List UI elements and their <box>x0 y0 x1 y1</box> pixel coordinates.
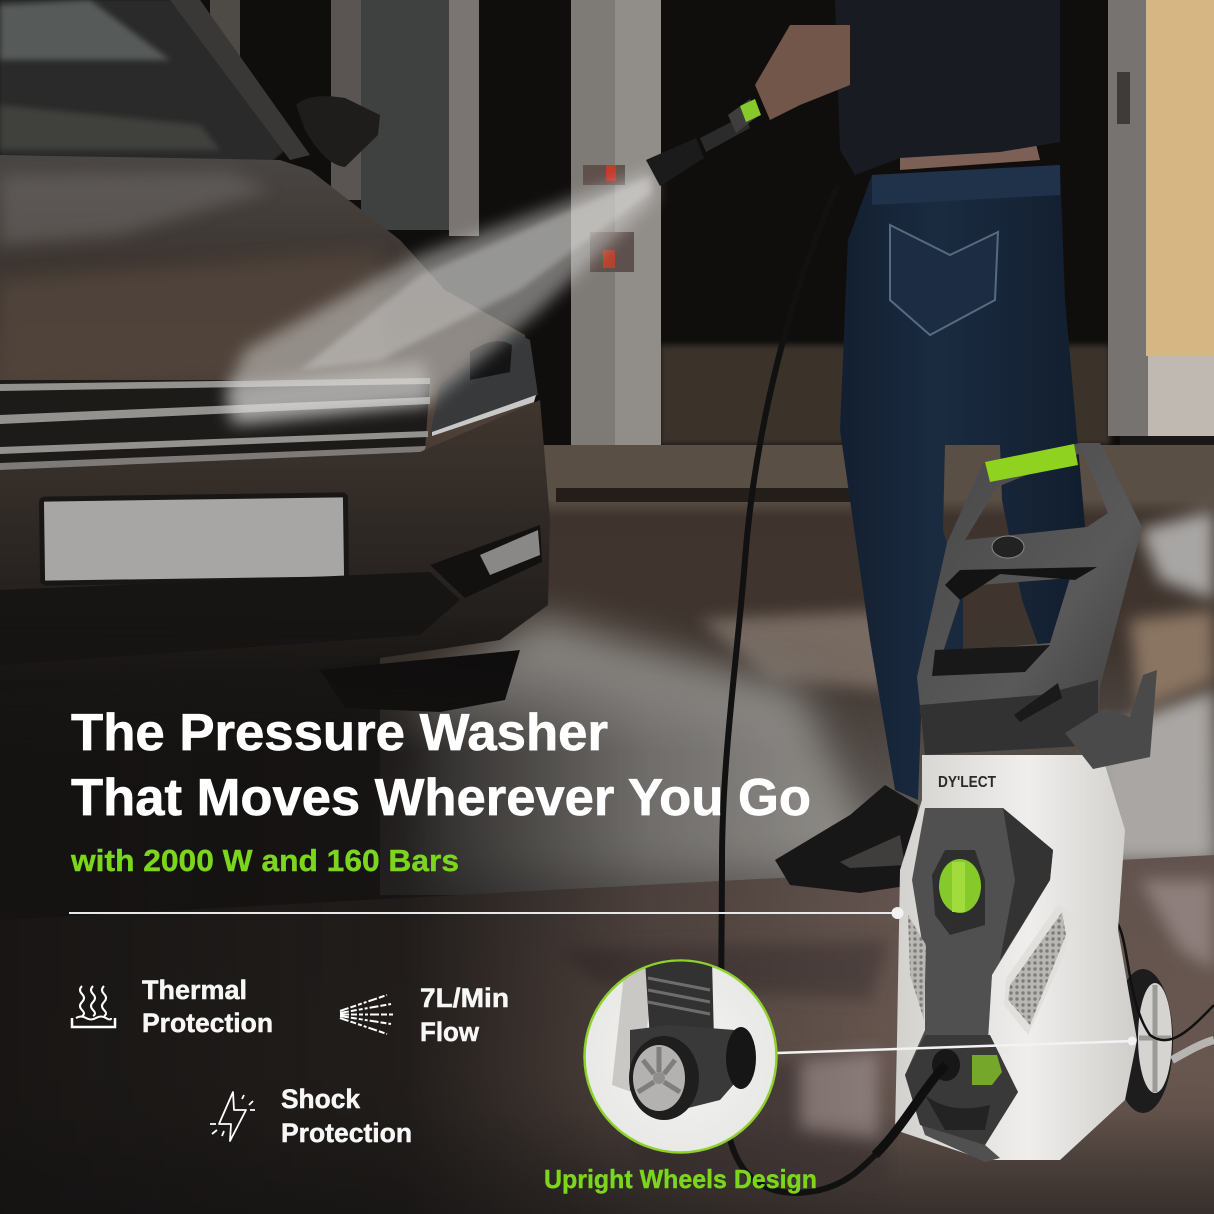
title <box>71 704 811 827</box>
pressure knob <box>932 850 985 935</box>
green handle grip <box>985 444 1078 482</box>
wheel <box>320 650 520 712</box>
inset caption: Upright Wheels Design <box>544 1164 817 1194</box>
spray wand <box>646 99 761 186</box>
divider with end dot <box>69 907 904 919</box>
icon: lightning bolt <box>210 1092 255 1141</box>
inset chassis <box>630 1028 734 1108</box>
supply hose <box>1172 1040 1214 1060</box>
left vent <box>908 915 926 1020</box>
hanger knob <box>992 536 1024 558</box>
skin at waist <box>900 140 1040 170</box>
car A-pillar and roof edge <box>170 0 310 160</box>
arm <box>755 25 850 120</box>
man <box>755 0 1085 893</box>
inset far wheel <box>726 1027 756 1089</box>
socket and hose connector <box>875 1049 960 1155</box>
feature: flow <box>340 983 509 1047</box>
title: That Moves Wherever You Go <box>71 769 811 827</box>
inset near wheel <box>629 1036 699 1120</box>
power cord <box>1113 918 1214 1040</box>
water spray <box>225 170 655 425</box>
feature: thermal protection <box>72 975 273 1038</box>
feature: flow: Flow <box>420 1017 480 1047</box>
green switch <box>972 1055 1002 1085</box>
high-pressure hose <box>721 185 875 1193</box>
headlight <box>430 330 538 436</box>
control panel <box>905 808 1053 1162</box>
subtitle: with 2000 W and 160 Bars <box>70 843 459 878</box>
inset handle block <box>646 962 714 1028</box>
inset washer body <box>612 965 650 1095</box>
inset: wheel detail <box>584 960 776 1152</box>
feature: shock protection: Protection <box>281 1118 412 1148</box>
icon: heat waves over water <box>72 986 115 1027</box>
car <box>0 0 550 712</box>
shoe <box>775 785 918 893</box>
darkening gradient behind text <box>0 620 1214 1214</box>
feature: thermal protection: Protection <box>142 1008 273 1038</box>
connector line to rear wheel <box>777 1036 1136 1053</box>
icon: water jet <box>340 995 394 1034</box>
lower grille <box>0 572 460 665</box>
feature: shock protection <box>210 1084 412 1148</box>
shirt <box>835 0 1060 175</box>
feature: flow: 7L/Min <box>420 983 509 1013</box>
fog light <box>430 525 542 598</box>
license plate <box>41 495 347 583</box>
rear wheel <box>1113 969 1173 1113</box>
washer body <box>895 755 1137 1160</box>
pressure washer <box>875 443 1214 1162</box>
feature: shock protection: Shock <box>281 1084 361 1114</box>
feature: thermal protection: Thermal <box>142 975 247 1005</box>
front bumper <box>0 400 550 692</box>
car windshield <box>0 0 285 163</box>
brand logo: DY'LECT <box>938 774 996 791</box>
jeans <box>840 165 1085 800</box>
right vent <box>1004 905 1076 1035</box>
lower grip recess <box>925 1095 990 1130</box>
nozzle holder tray <box>1065 670 1157 769</box>
car hood <box>0 155 550 520</box>
carry handle frame <box>917 443 1142 755</box>
grille <box>0 378 430 471</box>
side mirror <box>296 96 380 167</box>
title: The Pressure Washer <box>71 704 608 762</box>
